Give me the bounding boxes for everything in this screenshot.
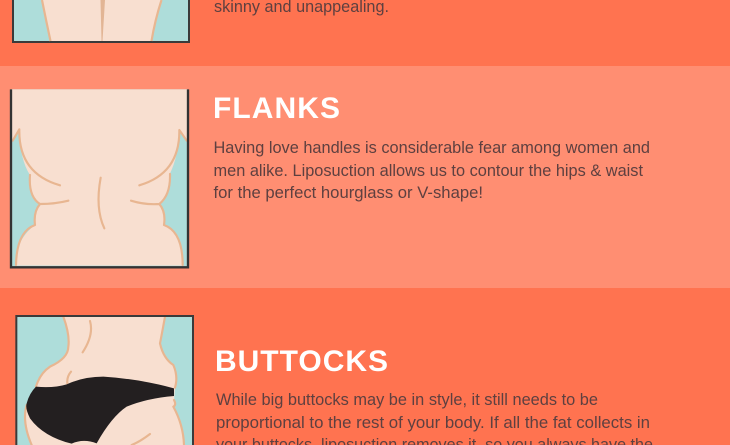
icon: thighs illustration: [13, 0, 189, 42]
icon: buttocks illustration: [16, 316, 193, 445]
heading: flanks: FLANKS: [213, 92, 340, 125]
icon: flanks illustration: [11, 89, 188, 267]
panel: flanks: [0, 66, 730, 288]
panel: buttocks: [0, 288, 730, 445]
heading: buttocks: BUTTOCKS: [215, 345, 388, 378]
text: buttocks description: [216, 391, 653, 445]
text: flanks description: men alike. Liposuction allows us to contour the hips & waist: [214, 162, 643, 180]
text: flanks description: for the perfect hourglass or V-shape!: [214, 184, 483, 202]
text: flanks description: Having love handles is considerable fear among women and: [214, 139, 650, 157]
panel: top section: [0, 0, 730, 66]
text: buttocks description: While big buttocks may be in style, it still needs to be: [216, 391, 598, 409]
text: buttocks description: proportional to the rest of your body. If all the fat collects in: [216, 414, 650, 432]
text: flanks description: [214, 139, 650, 202]
